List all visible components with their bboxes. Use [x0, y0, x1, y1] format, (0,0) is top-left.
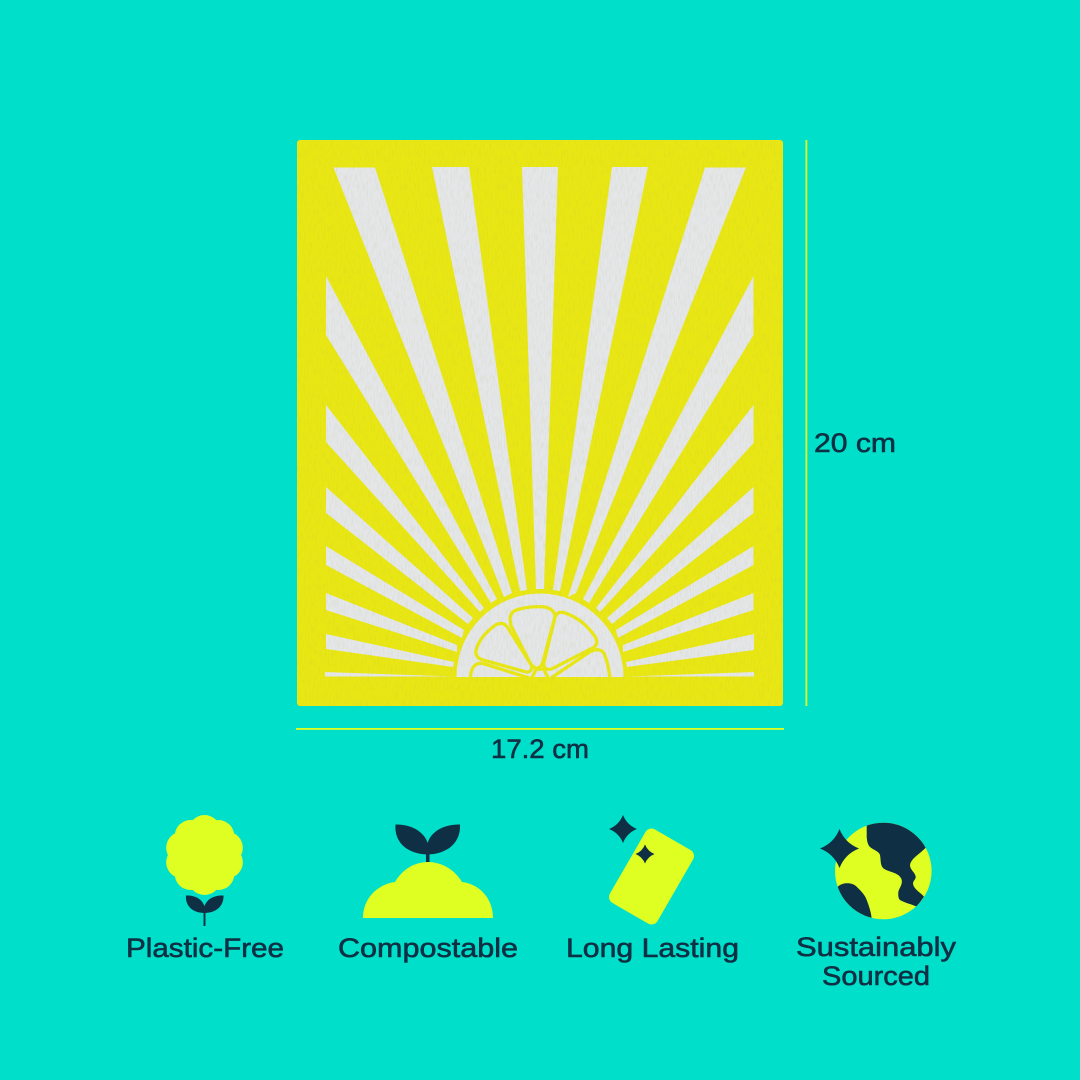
label: plastic-free: Plastic-Free [126, 933, 284, 963]
label: sustainably sourced: Sustainably [796, 932, 957, 962]
label: long lasting: Long Lasting [566, 933, 739, 963]
feature: sustainably sourced [797, 822, 956, 986]
feature: compostable [338, 824, 518, 963]
height dimension line [806, 140, 807, 706]
icon: sparkling cloth [606, 815, 697, 927]
cloth grain texture [297, 140, 783, 706]
panel: sponge cloth [297, 140, 783, 760]
icon: globe with sparkle [820, 822, 932, 920]
width dimension line [296, 728, 784, 730]
sun rays [325, 167, 754, 676]
label: sustainably sourced: Sourced [822, 961, 930, 991]
feature: plastic-free [126, 815, 284, 963]
height label: 20 cm [814, 428, 896, 458]
label: compostable: Compostable [338, 933, 518, 963]
feature: long lasting [566, 815, 739, 963]
label: sustainably sourced [796, 932, 957, 991]
lemon slice sun [456, 594, 624, 677]
icon: sprout on soil [363, 824, 493, 918]
icon: flower [166, 815, 243, 926]
width label: 17.2 cm [491, 734, 589, 764]
